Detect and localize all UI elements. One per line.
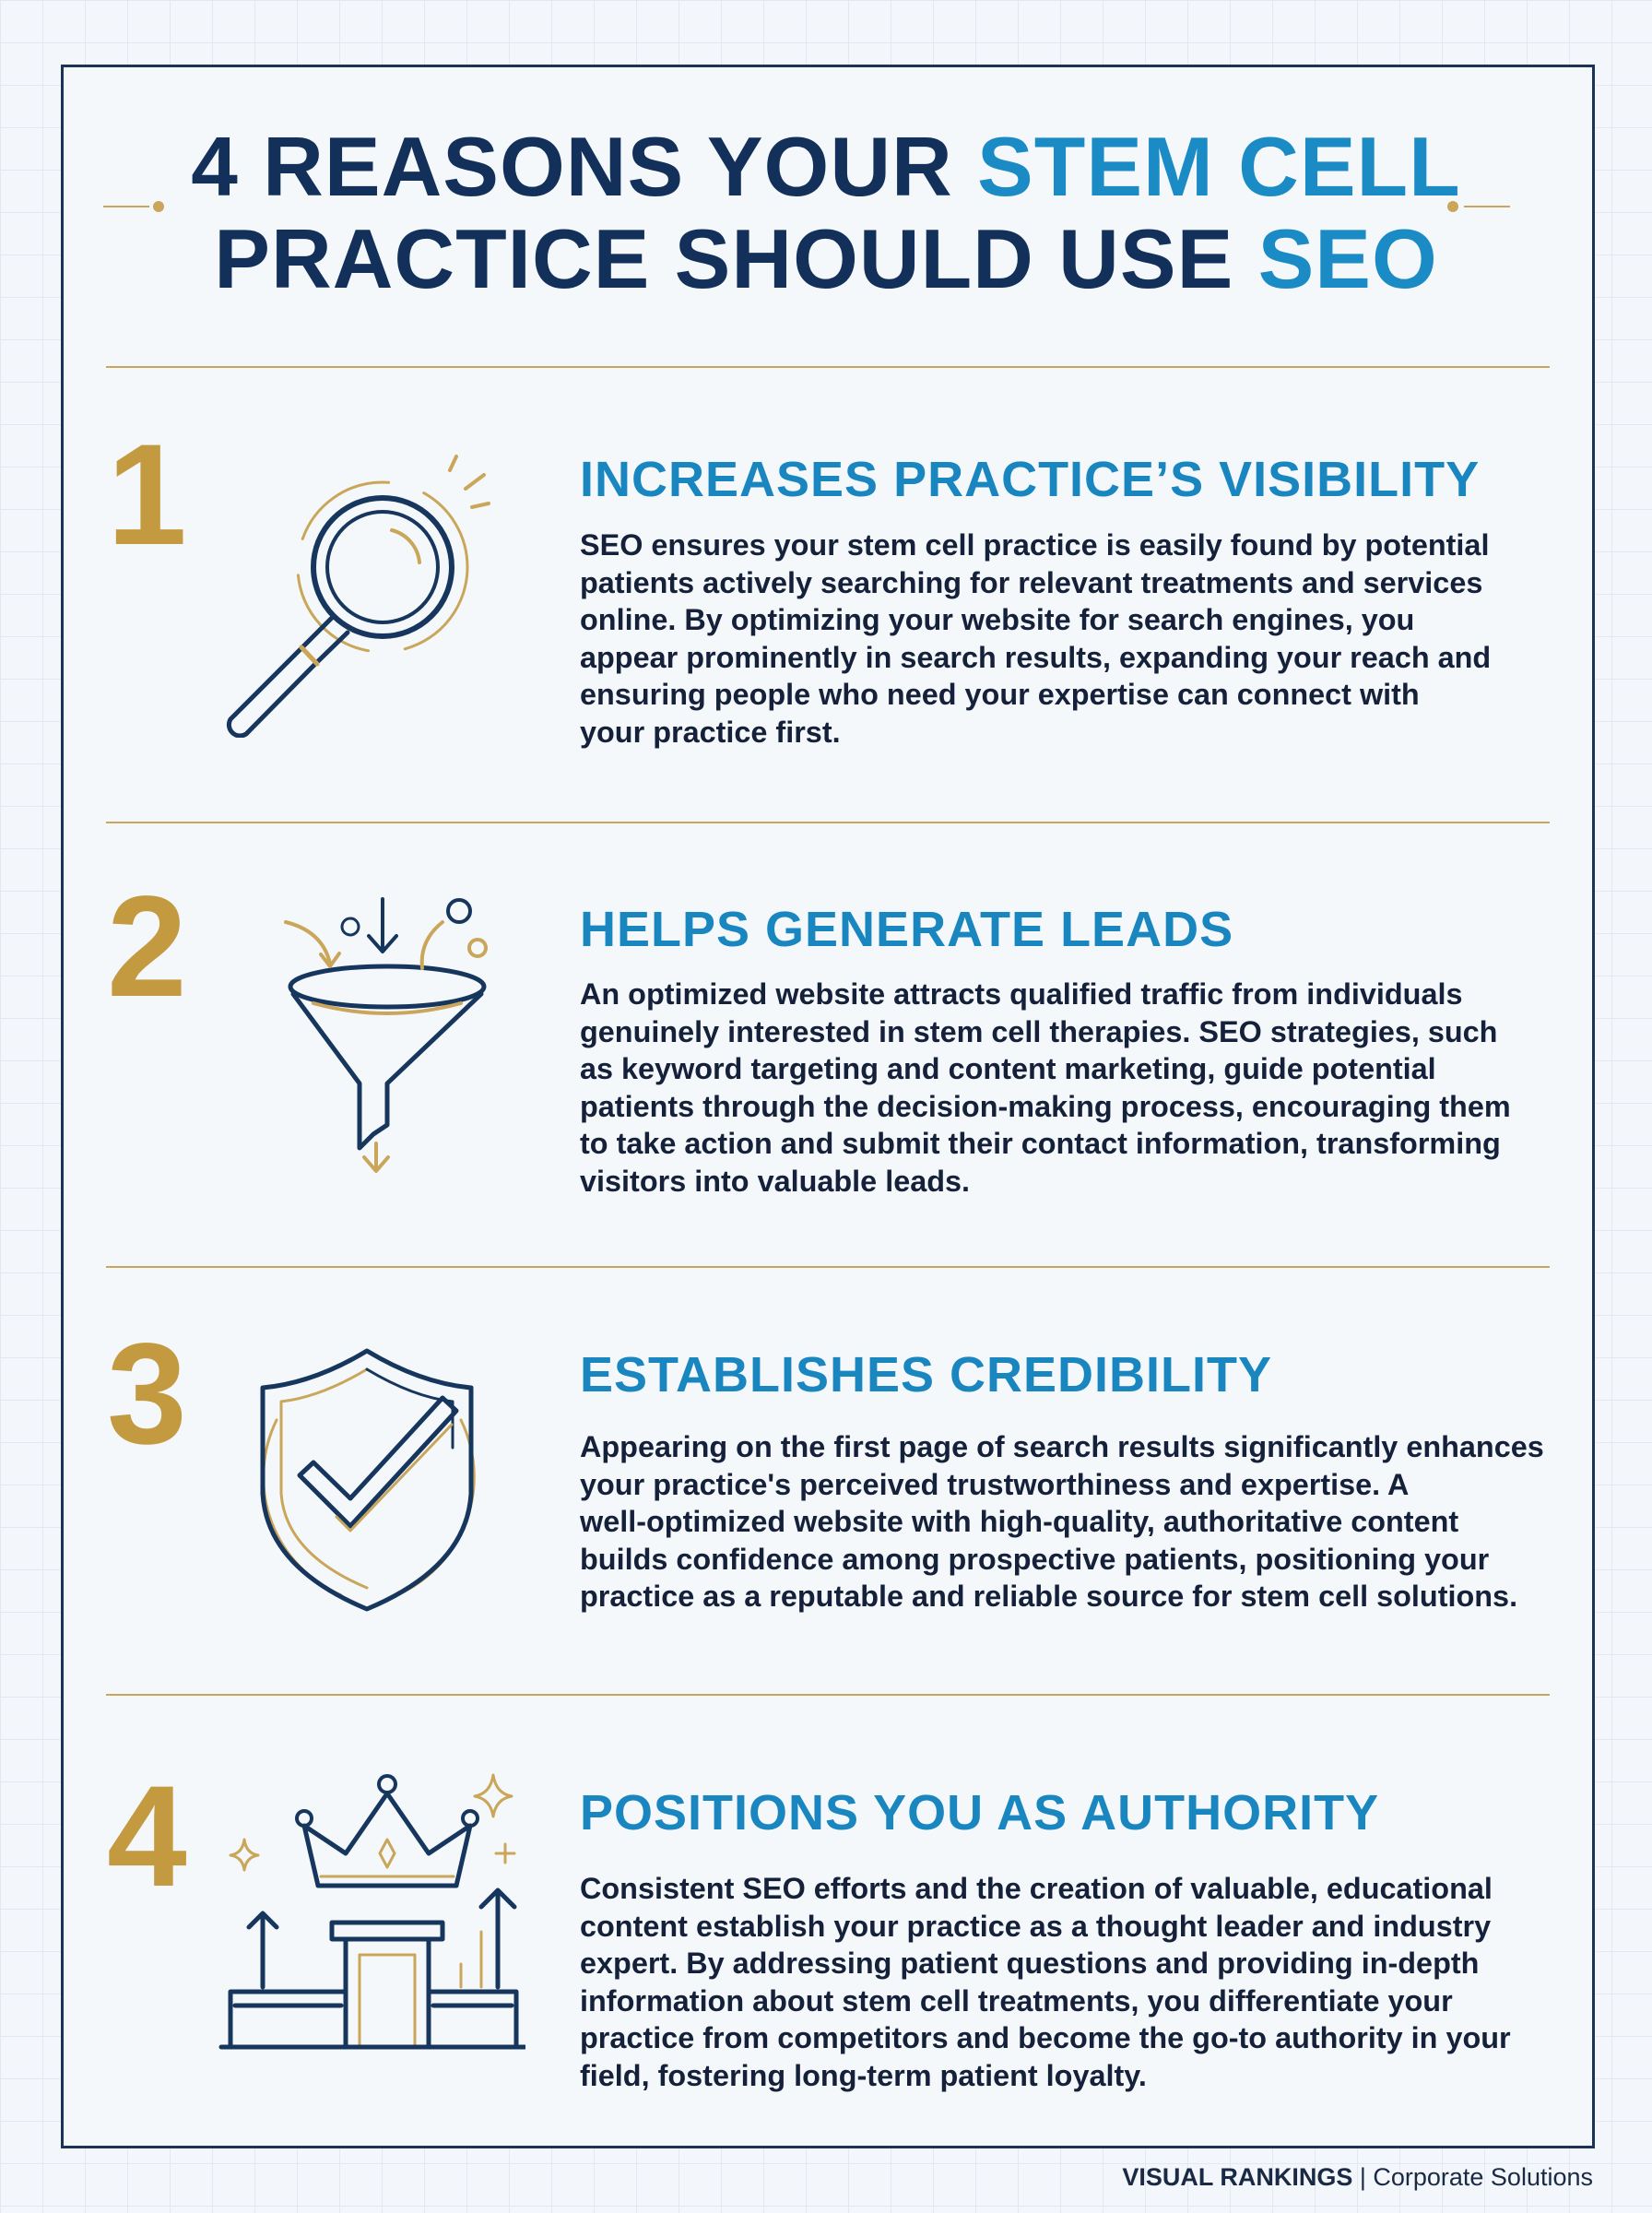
- body 3: Appearing on the first page of search results significantly enhances: [580, 1430, 1544, 1463]
- icon: shield check: [260, 1348, 476, 1612]
- title ornament left: [103, 201, 164, 212]
- body 3: builds confidence among prospective patients, positioning your: [580, 1542, 1489, 1575]
- body 4: content establish your practice as a thought leader and industry: [580, 1909, 1491, 1942]
- body 4: information about stem cell treatments, you differentiate your: [580, 1984, 1453, 2018]
- body 3: [579, 1430, 1544, 1613]
- icon: magnifier: [227, 454, 490, 738]
- body 4: expert. By addressing patient questions and providing in-depth: [580, 1947, 1479, 1980]
- title ornament right: [1447, 201, 1510, 212]
- heading 1: INCREASES PRACTICE’S VISIBILITY: [580, 452, 1480, 507]
- icon: funnel: [284, 897, 488, 1173]
- body 1: [580, 528, 1491, 749]
- heading 3: ESTABLISHES CREDIBILITY: [580, 1347, 1272, 1402]
- body 1: appear prominently in search results, expanding your reach and: [580, 640, 1491, 673]
- body 1: your practice first.: [580, 716, 841, 749]
- number 3: 3: [107, 1314, 187, 1474]
- body 4: field, fostering long-term patient loyalty.: [580, 2058, 1147, 2091]
- body 1: ensuring people who need your expertise can connect with: [580, 678, 1420, 711]
- icon: crown podium: [219, 1774, 525, 2049]
- body 1: online. By optimizing your website for search engines, you: [580, 603, 1414, 636]
- body 2: to take action and submit their contact information, transforming: [580, 1127, 1501, 1160]
- footer: VISUAL RANKINGS | Corporate Solutions: [1122, 2163, 1593, 2191]
- body 2: as keyword targeting and content marketing, guide potential: [580, 1052, 1436, 1085]
- body 4: Consistent SEO efforts and the creation of valuable, educational: [580, 1872, 1493, 1905]
- body 4: [580, 1872, 1511, 2091]
- title: 4 REASONS YOUR STEM CELL: [191, 121, 1461, 214]
- heading 2: HELPS GENERATE LEADS: [580, 902, 1233, 957]
- number 4: 4: [107, 1757, 187, 1917]
- title: [191, 121, 1461, 306]
- body 2: patients through the decision-making process, encouraging them: [580, 1090, 1511, 1123]
- body 3: your practice's perceived trustworthiness and expertise. A: [580, 1468, 1409, 1501]
- heading 4: POSITIONS YOU AS AUTHORITY: [580, 1785, 1379, 1840]
- number 1: 1: [107, 415, 187, 575]
- body 2: An optimized website attracts qualified traffic from individuals: [580, 977, 1462, 1011]
- body 2: visitors into valuable leads.: [580, 1164, 970, 1197]
- body 1: SEO ensures your stem cell practice is easily found by potential: [580, 528, 1489, 562]
- number 2: 2: [107, 867, 187, 1027]
- body 1: patients actively searching for relevant treatments and services: [580, 566, 1482, 599]
- body 4: practice from competitors and become the go-to authority in your: [580, 2021, 1511, 2054]
- body 2: [580, 977, 1511, 1197]
- body 2: genuinely interested in stem cell therapies. SEO strategies, such: [580, 1014, 1497, 1047]
- body 3: practice as a reputable and reliable source for stem cell solutions.: [580, 1580, 1517, 1613]
- title: PRACTICE SHOULD USE SEO: [214, 213, 1438, 306]
- body 3: well-optimized website with high-quality, authoritative content: [580, 1505, 1458, 1538]
